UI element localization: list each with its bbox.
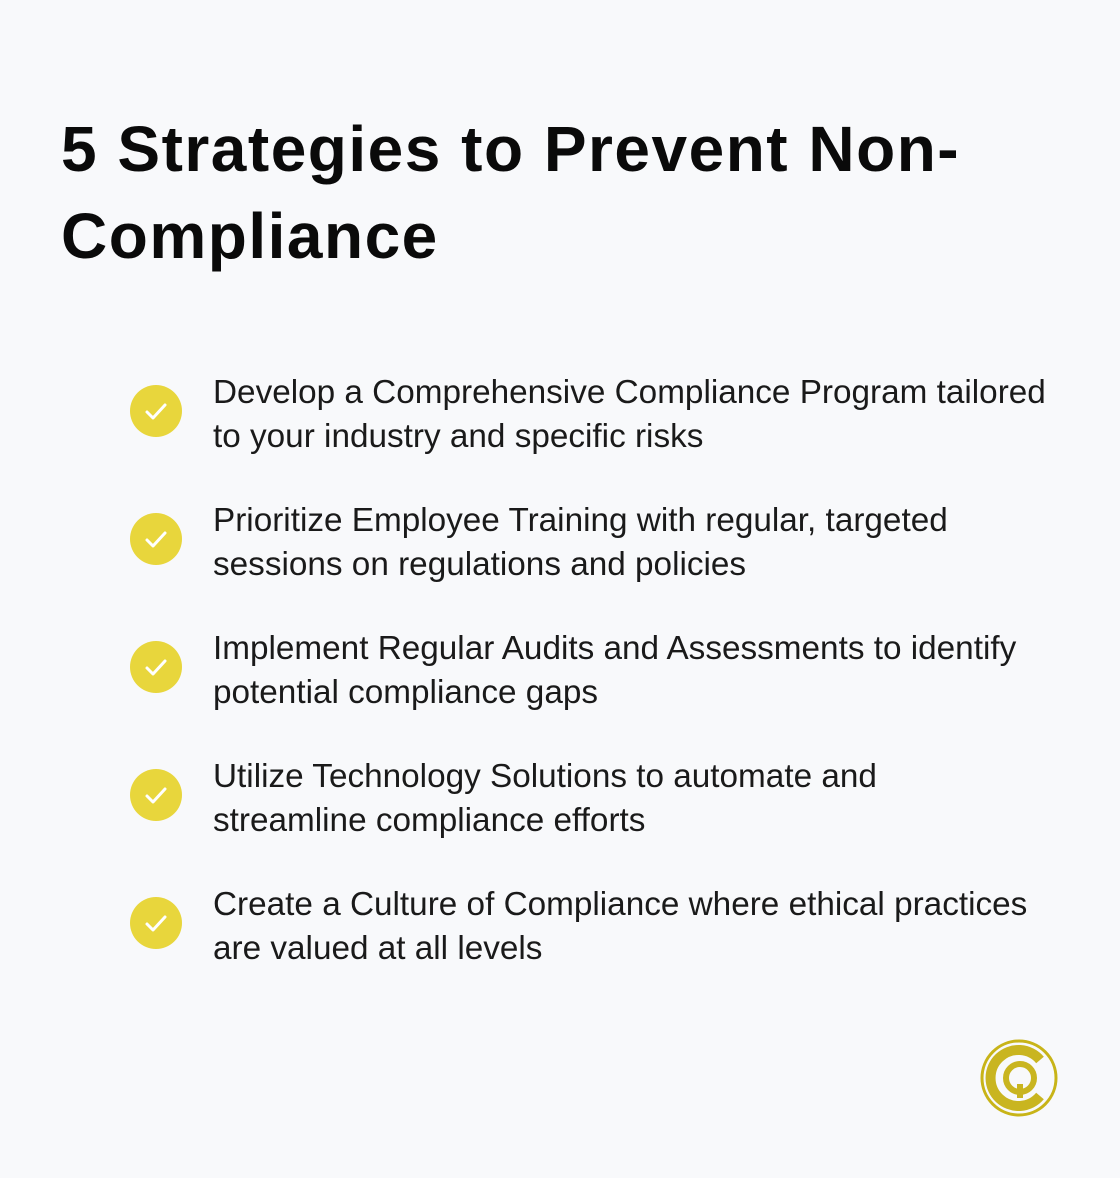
icon: check (130, 385, 182, 437)
title: 5 Strategies to Prevent Non- (61, 113, 960, 185)
text 2 (213, 502, 948, 583)
icon: check (130, 897, 182, 949)
item 2 (130, 502, 948, 583)
text 1 (213, 374, 1046, 455)
icon: check (130, 513, 182, 565)
text 5: Create a Culture of Compliance where ethical practices (213, 886, 1027, 923)
item 3 (130, 630, 1016, 711)
icon: check (130, 641, 182, 693)
text 1: Develop a Comprehensive Compliance Program tailored (213, 374, 1046, 411)
text 4: streamline compliance efforts (213, 802, 645, 839)
logo (980, 1040, 1058, 1116)
item 5 (130, 886, 1027, 967)
title: Compliance (61, 200, 439, 272)
item 4 (130, 758, 877, 839)
text 1: to your industry and specific risks (213, 418, 703, 455)
item 1 (130, 374, 1046, 455)
text 3: Implement Regular Audits and Assessments to identify (213, 630, 1016, 667)
text 5: are valued at all levels (213, 930, 542, 967)
text 4 (213, 758, 877, 839)
text 2: Prioritize Employee Training with regular, targeted (213, 502, 948, 539)
text 5 (213, 886, 1027, 967)
icon: check (130, 769, 182, 821)
text 3 (213, 630, 1016, 711)
text 4: Utilize Technology Solutions to automate and (213, 758, 877, 795)
title (61, 113, 960, 272)
text 3: potential compliance gaps (213, 674, 598, 711)
text 2: sessions on regulations and policies (213, 546, 746, 583)
